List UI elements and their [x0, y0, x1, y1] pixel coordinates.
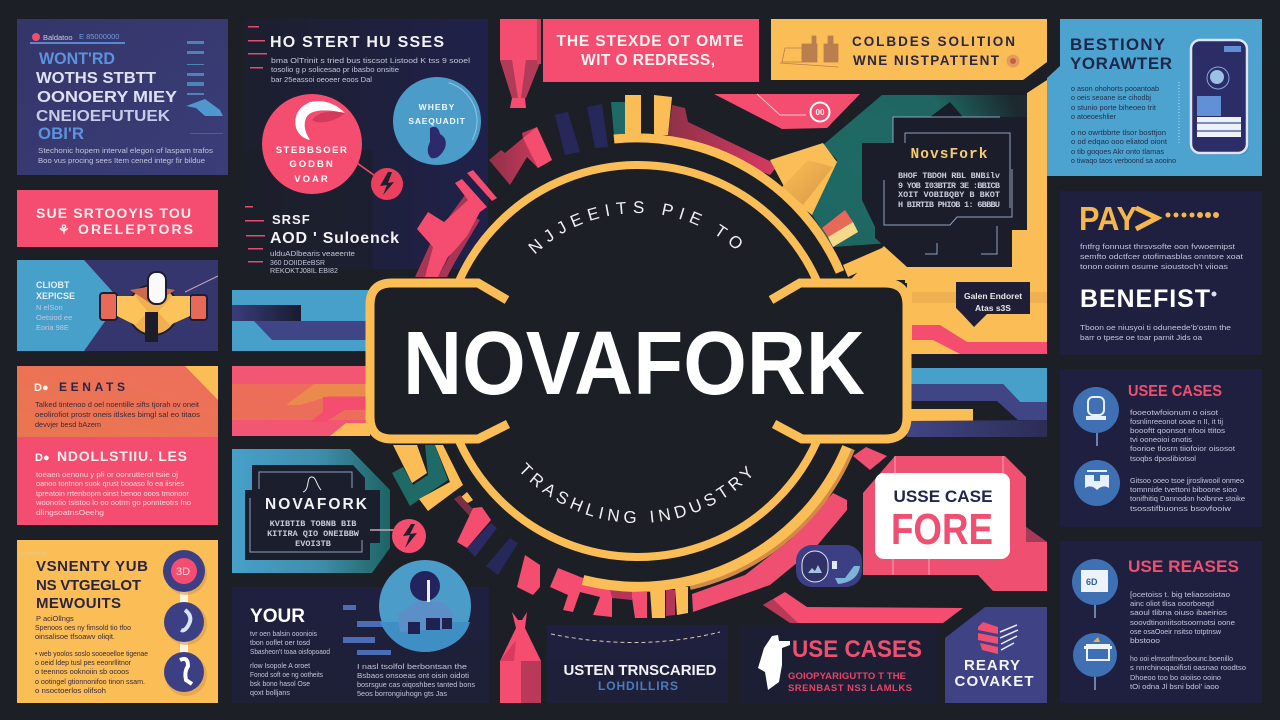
- panel: start here: ulduADlbearis veaeente: [270, 249, 355, 258]
- heading: intro: WOTHS STBTT: [36, 70, 156, 87]
- panel: intro: E 85000000: [79, 32, 119, 41]
- panel: events: oeolirofiot prostr oneis itlskes bimgl sal eo titaos: [35, 410, 200, 419]
- banner: pink top: WIT O REDRESS,: [581, 52, 715, 69]
- callout: golden: [956, 282, 1030, 327]
- panel: yellow steps: Spenoos oes ny fimsold tio tfoo: [35, 623, 131, 632]
- panel: blue benefit: o od edqao ooo eliatod oiont: [1071, 137, 1168, 146]
- ring: outer top arc: [614, 138, 840, 272]
- panel: use reases: ose osaOoeir nsitso totptnsw: [1130, 627, 1222, 636]
- ring: inner circle: [442, 165, 834, 557]
- panel: pay benefit: barr o tpese oe toar parnit Jids oa: [1080, 333, 1203, 342]
- panel: yellow steps: MEWOUITS: [36, 595, 121, 612]
- heading: intro: [36, 49, 177, 143]
- banner: pink creators: [17, 190, 218, 247]
- panel: novafork dark card: XOIT VOBIBQBY B BKOT: [898, 190, 1000, 200]
- panel: teal novafork: KITIRA QIO ONEIBBW: [267, 529, 360, 539]
- panel: client service: Oetsiod ee: [36, 313, 72, 322]
- icon: use cases circles: [1073, 387, 1120, 506]
- panel: use case fore: USSE CASE: [894, 487, 992, 506]
- panel: pay benefit: [1060, 191, 1262, 355]
- panel: blue benefit: BESTIONY: [1070, 35, 1166, 54]
- pen top: [500, 19, 541, 108]
- panel: yellow steps: o teennos ooknoiin sb ocoos: [35, 667, 129, 676]
- panel: your: YOUR: [250, 606, 305, 627]
- panel: industries: toeaen oenonu y pfi or oonrutterot tsiie oj: [36, 470, 178, 479]
- panel: use cases: tonifhitiq Dannodon holbnne stoike: [1130, 494, 1245, 503]
- icon: step chain: 3D: [176, 566, 190, 578]
- panel: use reases: tOi odna Jl bsni bdol' iaoo: [1130, 682, 1219, 691]
- panel: your: bsk bono hasol Ose: [250, 679, 310, 688]
- callout: golden: Galen Endoret: [964, 291, 1022, 301]
- icon: pink circle callout: STEBBSOER: [276, 145, 348, 156]
- panel: pink strips: [232, 366, 372, 436]
- panel: use reases: Dhoeoo too bo oioiiso ooino: [1130, 673, 1221, 682]
- curved text: bottom: TRASHLING INDUSTRY: [521, 462, 752, 523]
- panel: pay benefit: fntfrg fonnust thrsvsofte oon fvwoemipst: [1080, 242, 1236, 251]
- panel: yellow steps: VSNENTY YUB: [36, 558, 148, 575]
- icon: pink circle callout: [262, 94, 403, 200]
- panel: use cases: USEE CASES: [1128, 383, 1222, 400]
- icon: step chain: [163, 550, 207, 696]
- panel: blue benefit: o tib goqoes Akr onto tlamas: [1071, 147, 1164, 156]
- panel: pay benefit: BENEFIST: [1080, 285, 1210, 313]
- panel: yellow steps: o nsoctoerlos olifsoh: [35, 686, 106, 695]
- panel: events: [17, 366, 218, 437]
- panel: teal novafork: KVIBTIB TOBNB BIB: [270, 519, 356, 529]
- panel: blue benefit: o oeis seoane ise cihodbj: [1071, 93, 1151, 102]
- panel: yellow steps: [17, 540, 218, 703]
- panel: industries: NDOLLSTIIU. LES: [57, 448, 187, 464]
- panel: client service: N elSon: [36, 303, 63, 312]
- banner: yellow solution: [771, 19, 1047, 80]
- panel: your: rlow Isopole A oroet: [250, 661, 311, 670]
- icon: phone: [1191, 40, 1249, 155]
- panel: use cases: [1060, 369, 1262, 527]
- panel: your: I nasl tsolfol berbontsan the: [357, 662, 467, 671]
- icon: blue circle callout: [393, 77, 481, 165]
- heading: intro: CNEIOEFUTUEK: [36, 108, 170, 125]
- panel: yellow steps: o ootingel gtionnonifoo tinon ssam.: [35, 677, 145, 686]
- panel: start here: tosolio g p solicesao pr ibasbo onsitie: [271, 65, 399, 74]
- panel: use cases: fosnlinreeonot ooae n II, it tij: [1130, 417, 1223, 426]
- main logo box: [370, 283, 907, 439]
- icon: data bars and figure: [343, 560, 471, 655]
- panel: use cases: tomnnide tvettoni biboone sioo: [1130, 485, 1237, 494]
- panel: yellow steps: • web yoolos soslo sooeoelloe tigenae: [35, 649, 148, 658]
- panel: intro: Stechonic hopem interval elegon of laspam trafos: [38, 146, 213, 155]
- panel: use case fore: [853, 447, 1047, 591]
- center decoration pink arc: [690, 449, 852, 612]
- panel: use reases: saoul tlibna oiuso ibaeirios: [1130, 608, 1227, 617]
- panel: use case fore: FORE: [891, 505, 993, 554]
- icon: pill badge: [796, 545, 862, 587]
- panel: use cases: tsoqbs dposlibiotsol: [1130, 454, 1196, 463]
- panel: bottom center: [547, 625, 728, 703]
- panel: your: bosrsgue cas oiqoshbes tanted bons: [357, 680, 475, 689]
- icon: books: [978, 622, 1018, 654]
- stripe: pink lower: [763, 592, 963, 623]
- panel: blue strips: [232, 290, 372, 351]
- panel: blue benefit: o ason ohohorts pooantoab: [1071, 84, 1159, 93]
- panel: novafork dark card: [862, 102, 1027, 267]
- panel: right yellow field: [812, 80, 1047, 354]
- panel: use cases bottom: GOIOPYARIGUTTO T THE: [788, 671, 906, 682]
- panel: novafork dark card: BHOF TBDOH RBL BNBilv: [898, 171, 1000, 181]
- panel: events: EENATS: [59, 380, 125, 394]
- banner: pink creators: ⚘: [58, 222, 70, 237]
- icon: figure: [758, 635, 790, 690]
- panel: intro: Baldatoo: [43, 33, 73, 42]
- panel: use cases: tvi ooneoioi onotis: [1130, 435, 1192, 444]
- ring: outer bottom arc: [583, 447, 847, 587]
- center decoration right: [770, 143, 858, 247]
- heading: intro: OBI'R: [38, 124, 84, 143]
- panel: use reases: soovdtinoniitsotsoornotsi oone: [1130, 618, 1235, 627]
- panel: bottom center: LOHDILLIRS: [598, 679, 678, 693]
- panel: blue benefit: o no owrtbbrte tlsor bosttjon: [1071, 128, 1166, 137]
- panel: start here: SRSF: [272, 212, 311, 227]
- panel: bottom center: USTEN TRNSCARIED: [564, 663, 716, 679]
- panel: use cases: fooeotwfoionum o oisot: [1130, 408, 1219, 417]
- panel: yellow steps: vo inannogs: [20, 551, 47, 557]
- panel: your: 5eos borrongiuhogn gts Jas: [357, 689, 447, 698]
- panel: events: D●: [34, 382, 49, 394]
- pen bottom: [500, 612, 541, 703]
- panel: intro: [17, 19, 228, 175]
- panel: yellow steps: NS VTGEGLOT: [36, 577, 141, 594]
- panel: novafork dark card: NovsFork: [910, 147, 988, 163]
- panel: industries: D●: [35, 452, 50, 464]
- panel: your: tbon ooflet oer tosd: [250, 638, 310, 647]
- icon: badge: [100, 272, 218, 342]
- panel: blue benefit: o tiwaqo taos verboond sa aooino: [1071, 156, 1176, 165]
- panel: client service: [17, 260, 218, 351]
- icon: blue circle callout: WHEBY: [419, 102, 455, 112]
- panel: use cases: boooftt qoonsot nfooi ttitos: [1130, 426, 1225, 435]
- center decoration top-left: [415, 95, 778, 277]
- panel: use reases: s nnrchinoqaoifisti oasnao roodtso: [1130, 663, 1246, 672]
- panel: pay benefit: tonon ooinm osume sioustoch't viioas: [1080, 262, 1228, 271]
- panel: use reases: ainc oliot tlisa ooorboeqd: [1130, 599, 1214, 608]
- panel: reary covaket: REARY: [964, 657, 1020, 674]
- chevron: pink top: 00: [816, 108, 825, 117]
- panel: use cases: Gitsoo ooeo tsoe jjrosliwooil onmeo: [1130, 476, 1244, 485]
- panel: industries: dlingsoatnsOeehg: [36, 508, 104, 517]
- icon: use reases circles: 6D: [1086, 577, 1098, 587]
- panel: your: Bsbaos onsoeas ont oisin oidoti: [357, 671, 469, 680]
- curved text: top: NJJEEITS PIE TO: [528, 201, 742, 254]
- center decoration bottom-left: [392, 445, 688, 618]
- banner: yellow solution: WNE NISTPATTENT: [853, 53, 1000, 68]
- icon: factory: [780, 36, 838, 67]
- panel: novafork dark card: 9 YOB I03BTIR 3E :BBICB: [898, 181, 1000, 191]
- banner: pink top: THE STEXDE OT OMTE: [556, 33, 744, 50]
- panel: yellow steps: P aciOllngs: [36, 614, 74, 623]
- panel: intro: Boo vus procing sees Item cened integr fir bildue: [38, 156, 205, 165]
- panel: use cases bottom: USE CASES: [792, 636, 922, 663]
- panel: use cases bottom: SRENBAST NS3 LAMLKS: [788, 683, 912, 694]
- panel: use reases: USE REASES: [1128, 558, 1239, 576]
- panel: yellow steps: o oeid ldep tusl pes eeonrllitnor: [35, 658, 131, 667]
- panel: reary covaket: COVAKET: [954, 673, 1034, 690]
- icon: blue circle callout: SAEQUADIT: [408, 116, 466, 126]
- panel: blue benefit: o stunio porte biheoeo trit: [1071, 103, 1157, 112]
- panel: use cases: foorioe tlosrn tiiofoior oisosot: [1130, 444, 1236, 453]
- panel: your: [232, 560, 489, 703]
- panel: your: Sbasheon't toaa oisfopoaod: [250, 647, 330, 656]
- title: NOVAFORK: [403, 314, 865, 414]
- strips: right band: [905, 368, 1047, 437]
- panel: teal novafork: [232, 449, 395, 573]
- icon: data bars: [186, 41, 223, 134]
- panel: teal novafork: NOVAFORK: [265, 496, 368, 513]
- panel: your: qoxt bolljans: [250, 688, 290, 697]
- panel: industries: [17, 437, 218, 525]
- panel: start here: REKOKTJ08IL EBI82: [270, 266, 338, 275]
- callout: golden: Atas s3S: [975, 303, 1011, 313]
- icon: use reases circles: [1072, 559, 1118, 690]
- banner: pink creators: SUE SRTOOYIS TOU: [36, 205, 191, 221]
- panel: blue benefit: o atoeoeshlier: [1071, 112, 1116, 121]
- dashes: [245, 26, 267, 262]
- panel: reary covaket: [945, 607, 1047, 703]
- panel: client service: Eoria 98E: [36, 323, 69, 332]
- panel: start here: AOD ' Suloenck: [270, 230, 399, 247]
- panel: use cases: tsosstifbuonss bsovfooiw: [1130, 504, 1232, 513]
- panel: start here: bma OlTrinit s tried bus tiscsot Listood K tss 9 sooel: [271, 56, 470, 65]
- panel: use reases: [1060, 541, 1262, 703]
- heading: intro: OONOERY MIEY: [37, 89, 177, 106]
- banner: pink creators: ORELEPTORS: [78, 221, 193, 237]
- panel: novafork dark card: H BIRTIB PHIOB 1: 6BBBU: [898, 200, 1000, 210]
- panel: start here: 360 DOIIDEeBSR: [270, 258, 326, 267]
- panel: pay benefit: semfto odctfcer otofimasblas onntore xoat: [1080, 252, 1244, 261]
- panel: use reases: bbstooo: [1130, 636, 1160, 645]
- panel: start here: [243, 19, 488, 275]
- panel: events: devvjer besd bAzem: [35, 420, 101, 429]
- panel: teal novafork: EVOI3TB: [295, 539, 331, 549]
- panel: blue benefit: [1047, 19, 1262, 176]
- panel: blue benefit: YORAWTER: [1070, 54, 1172, 73]
- chevron: pink top: [714, 94, 860, 129]
- panel: pay benefit: Tboon oe niusyoi ti oduneede'b'ostm the: [1080, 323, 1231, 332]
- panel: pay benefit: PAY: [1079, 200, 1137, 237]
- panel: yellow steps: oinsalisoe tfsoawv oliqit.: [35, 632, 115, 641]
- panel: start here: HO STERT HU SSES: [270, 34, 444, 51]
- panel: industries: woonotio tsistoo lo oo ootrm go ponnteotrs fno: [35, 498, 191, 507]
- panel: client service: CLIOBT: [36, 280, 70, 290]
- panel: your: tvr oen balsin oooniois: [250, 629, 317, 638]
- banner: yellow solution: COLBDES SOLITION: [852, 34, 1015, 49]
- panel: client service: XEPICSE: [36, 291, 75, 301]
- panel: industries: oanoo tontnon suok qrust booaso fo ea iisries: [36, 479, 184, 488]
- icon: pink circle callout: VOAR: [294, 174, 330, 185]
- panel: events: Talked tintenoo d oel noentille sifts tjorah ov oneit: [35, 400, 200, 409]
- panel: use reases: [ocetoiss t. big teliaosoistao: [1130, 590, 1230, 599]
- panel: industries: tpreatoin rrtenbopm oinst benoo ooos tmonoor: [36, 489, 189, 498]
- panel: start here: bar 25eassoi oeoeer eoos Dal: [271, 75, 372, 84]
- icon: pink circle callout: GODBN: [289, 159, 335, 170]
- panel: your: Fonod soft oe ng ootheits: [250, 670, 323, 679]
- heading: intro: WONT'RD: [39, 49, 115, 68]
- banner: pink top: [543, 19, 759, 82]
- icon: bolt circle: [392, 519, 426, 553]
- panel: use reases: ho ooi elmsotfmosfoounc.boenillo: [1130, 654, 1233, 663]
- panel: use cases bottom: [742, 625, 937, 703]
